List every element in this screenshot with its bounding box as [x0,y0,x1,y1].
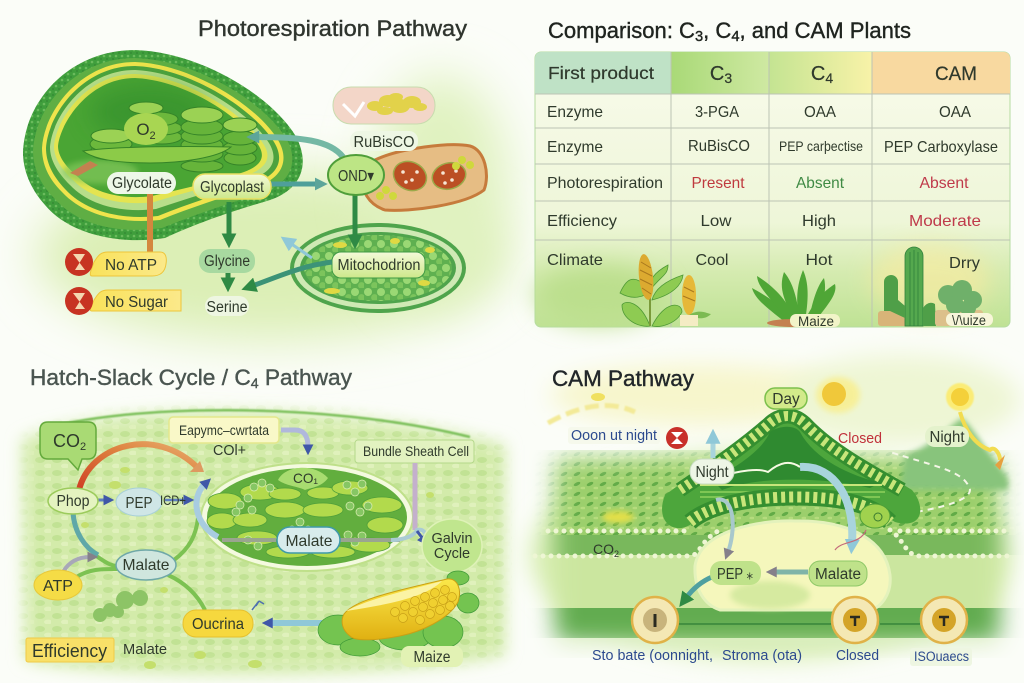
label: enzyme box: Eapymc–cwrtata [179,422,269,438]
heading: hatch-slack: 4 [251,375,259,391]
oxygen bubble [124,113,168,145]
table row: climate: Cool [696,252,728,269]
heading: comparison: 3 [695,28,703,45]
arrow: glycoplast to glycine [226,202,232,237]
table row: climate [547,252,833,269]
label: malate left [116,550,176,580]
heading: hatch-slack: Pathway [259,365,353,390]
maize cob with leaves [318,571,479,667]
label: pep [116,488,162,516]
plant: c4 grass [752,270,840,329]
heading: comparison: Comparison: C [548,18,698,43]
arrow: ond to chloroplast [256,137,343,157]
label: co2: 2 [614,549,619,559]
label: day: Day [772,391,800,408]
arrow: pep to stoma [686,577,712,598]
label: bundle sheath cell: Bundle Sheath Cell [363,443,469,459]
label: maize [401,646,463,667]
label: pep [710,561,761,585]
panel: hatch-slack cycle [0,365,512,683]
label: enzyme box [169,417,279,443]
label: ond [328,155,384,195]
label: maize: Maize [414,649,450,666]
arrow: red co2 arc [79,444,198,490]
warning: no sugar: No Sugar [105,294,169,311]
bundle sheath cell [201,463,413,571]
arrow: glycine to serine [226,273,230,281]
table row: photorespiration: Present [692,175,745,192]
label: co2 bubble [40,422,96,470]
mitochondrion [290,194,466,313]
label: phop [48,488,98,514]
label: day [765,388,807,409]
table row: enzyme 1: Enzyme [547,104,603,121]
panel: cam pathway [512,355,1024,666]
table row: photorespiration: Absent [920,175,969,192]
label: serine: Serine [206,299,248,316]
arrow: pep to cell [165,499,186,501]
label: maize: Maize [798,313,834,329]
table row: climate: Hot [806,252,833,269]
icon: small sprout [252,601,264,610]
icon: stoma closed 2 [921,597,967,643]
label: rubisco: RuBisCO [354,134,414,151]
plant: wheat [620,253,711,326]
table header row: 3 [724,70,732,86]
label: calvin cycle [422,519,482,573]
label: calvin cycle: Cycle [434,546,470,562]
table row: photorespiration: Absent [796,175,845,192]
icon: guard cell swirl [860,504,890,528]
table header row [548,63,977,86]
organelle: pink vesicle [333,87,435,124]
label: wuize: \/\uize [952,312,986,328]
table row: enzyme 1 [547,104,971,121]
table row: enzyme 2 [547,138,998,156]
heading: cam pathway: CAM Pathway [552,366,695,391]
label: isouaecs caption: ISOuaecs [914,649,969,664]
thylakoid stacks [90,102,257,172]
table row: efficiency: Low [700,213,732,230]
label: night right: Night [930,429,965,446]
label: pep: PEP [126,495,152,512]
plant: cactus [878,247,993,328]
warning: no sugar [65,287,181,315]
vacuole [695,521,890,610]
heading: comparison: 4 [731,28,740,45]
table header row: First product [548,63,654,83]
label: oooonut night: Ooon ut night [571,428,657,444]
table row: efficiency: Moderate [909,213,981,230]
label: stoma caption 1: Sto bate (oonnight, [592,648,713,664]
table header row: CAM [935,64,977,85]
organelle: brown mitochondrion [363,145,486,210]
table row: efficiency: Efficiency [547,213,617,230]
table row: enzyme 2: PEP Carboxylase [884,139,998,156]
label: malate in cell [277,527,340,553]
label: ond: OND▾ [338,168,374,185]
table row: photorespiration: Photorespiration [547,175,663,192]
co1 leaf [278,468,328,490]
label: night right [925,426,969,447]
label: night centre [690,459,734,484]
chloroplast [23,50,303,240]
label: efficiency: Efficiency [32,641,107,661]
arrow: mitochondrion to serine [252,262,332,286]
icon: stoma open [632,597,678,643]
arrow: blue loop [196,484,218,537]
oxygen bubble: 2 [150,130,156,142]
table row: enzyme 2: Enzyme [547,139,603,156]
label: glycoplast [193,174,271,199]
heading: photorespiration pathway: Photorespiration Pathway [198,16,468,41]
table header row: C [710,63,724,85]
label: pep: PEP ⁎ [717,566,753,583]
icon: sun near day [816,377,860,413]
table row: climate: Climate [547,252,603,269]
label: closed caption: Closed [836,648,879,664]
arrow: enzyme to cell [281,430,308,447]
heading: comparison: , C [703,18,731,43]
label: mitochondrion: Mitochodrion [338,257,420,274]
arrow: glycoplast to ond [268,182,318,186]
arrow: mitochondrion to cytosol [290,243,312,258]
table row: enzyme 1: OAA [939,104,971,121]
co1 leaf: CO₁ [293,470,318,486]
arrow: bundle sheath to calvin [391,463,428,540]
beaded membranes [535,530,1014,556]
label: glycine [199,249,255,273]
table row: enzyme 1: 3-PGA [695,104,739,121]
arrow: corn to oucrina [270,620,322,626]
label: stoma caption 2: Stroma (ota) [722,648,802,664]
stroma lamella [83,146,231,163]
heading: comparison: , and CAM Plants [740,18,911,43]
table row: efficiency [547,213,981,230]
label: malate: Malate [815,566,861,583]
arrow: phop malate [73,512,98,555]
label: col+: COl+ [213,442,246,459]
leaf background [0,395,512,683]
label: glycine: Glycine [204,253,250,270]
arrow: phop to pep [98,498,106,502]
arrow: large day arrow [800,467,852,543]
label: dry: Drry [949,255,980,272]
label: oucrina: Oucrina [192,616,244,633]
table row: efficiency: High [802,213,836,230]
label: closed red: Closed [838,430,882,447]
icon: closed warning [666,427,688,449]
label: co2 bubble: CO [53,431,80,451]
arrow: atp [63,557,90,572]
label: co2: CO [593,541,614,557]
label: oucrina [183,610,253,637]
arrow: malate to pep [774,570,808,574]
table header row: C [811,63,825,85]
warning: no atp: No ATP [105,257,157,274]
label: calvin cycle: Galvin [431,531,473,547]
icon: sun near night [946,383,1005,470]
table header row: 4 [825,70,833,86]
heading: hatch-slack: Hatch-Slack Cycle / C [30,365,249,390]
table row: enzyme 2: RuBisCO [688,138,750,155]
label: co2 bubble: 2 [80,441,86,453]
label: atp: ATP [43,578,73,595]
panel: photorespiration pathway [23,16,510,340]
arrow: night up [710,440,716,458]
label: glycoplast: Glycoplast [200,179,265,196]
label: mitochondrion [332,252,425,278]
label: phop: Phop [56,493,90,510]
table row: enzyme 2: PEP carþectise [779,138,863,154]
warning: no atp [65,248,166,276]
panel: comparison table [535,18,1010,329]
label: malate in cell: Malate [286,533,333,550]
oxygen bubble: O [136,120,150,139]
leaf cross-section dome [662,408,920,528]
label: icd: ICD+ [160,492,186,508]
label: bundle sheath cell [355,440,474,463]
icon: stoma closed 1 [832,597,878,643]
label: glycolate: Glycolate [112,175,172,192]
arrow: loop to pep [716,500,733,552]
table row: photorespiration [547,175,969,192]
table row: enzyme 1: OAA [804,104,836,121]
table background [535,52,1010,327]
green connector arcs [75,518,205,610]
meadow background [512,355,1024,660]
orange connector line [147,190,153,252]
label: malate left: Malate [122,557,170,574]
label: malate [809,561,867,586]
label: atp [34,570,82,600]
label: malate bottom: Malate [123,641,167,658]
label: night centre: Night [696,464,729,481]
